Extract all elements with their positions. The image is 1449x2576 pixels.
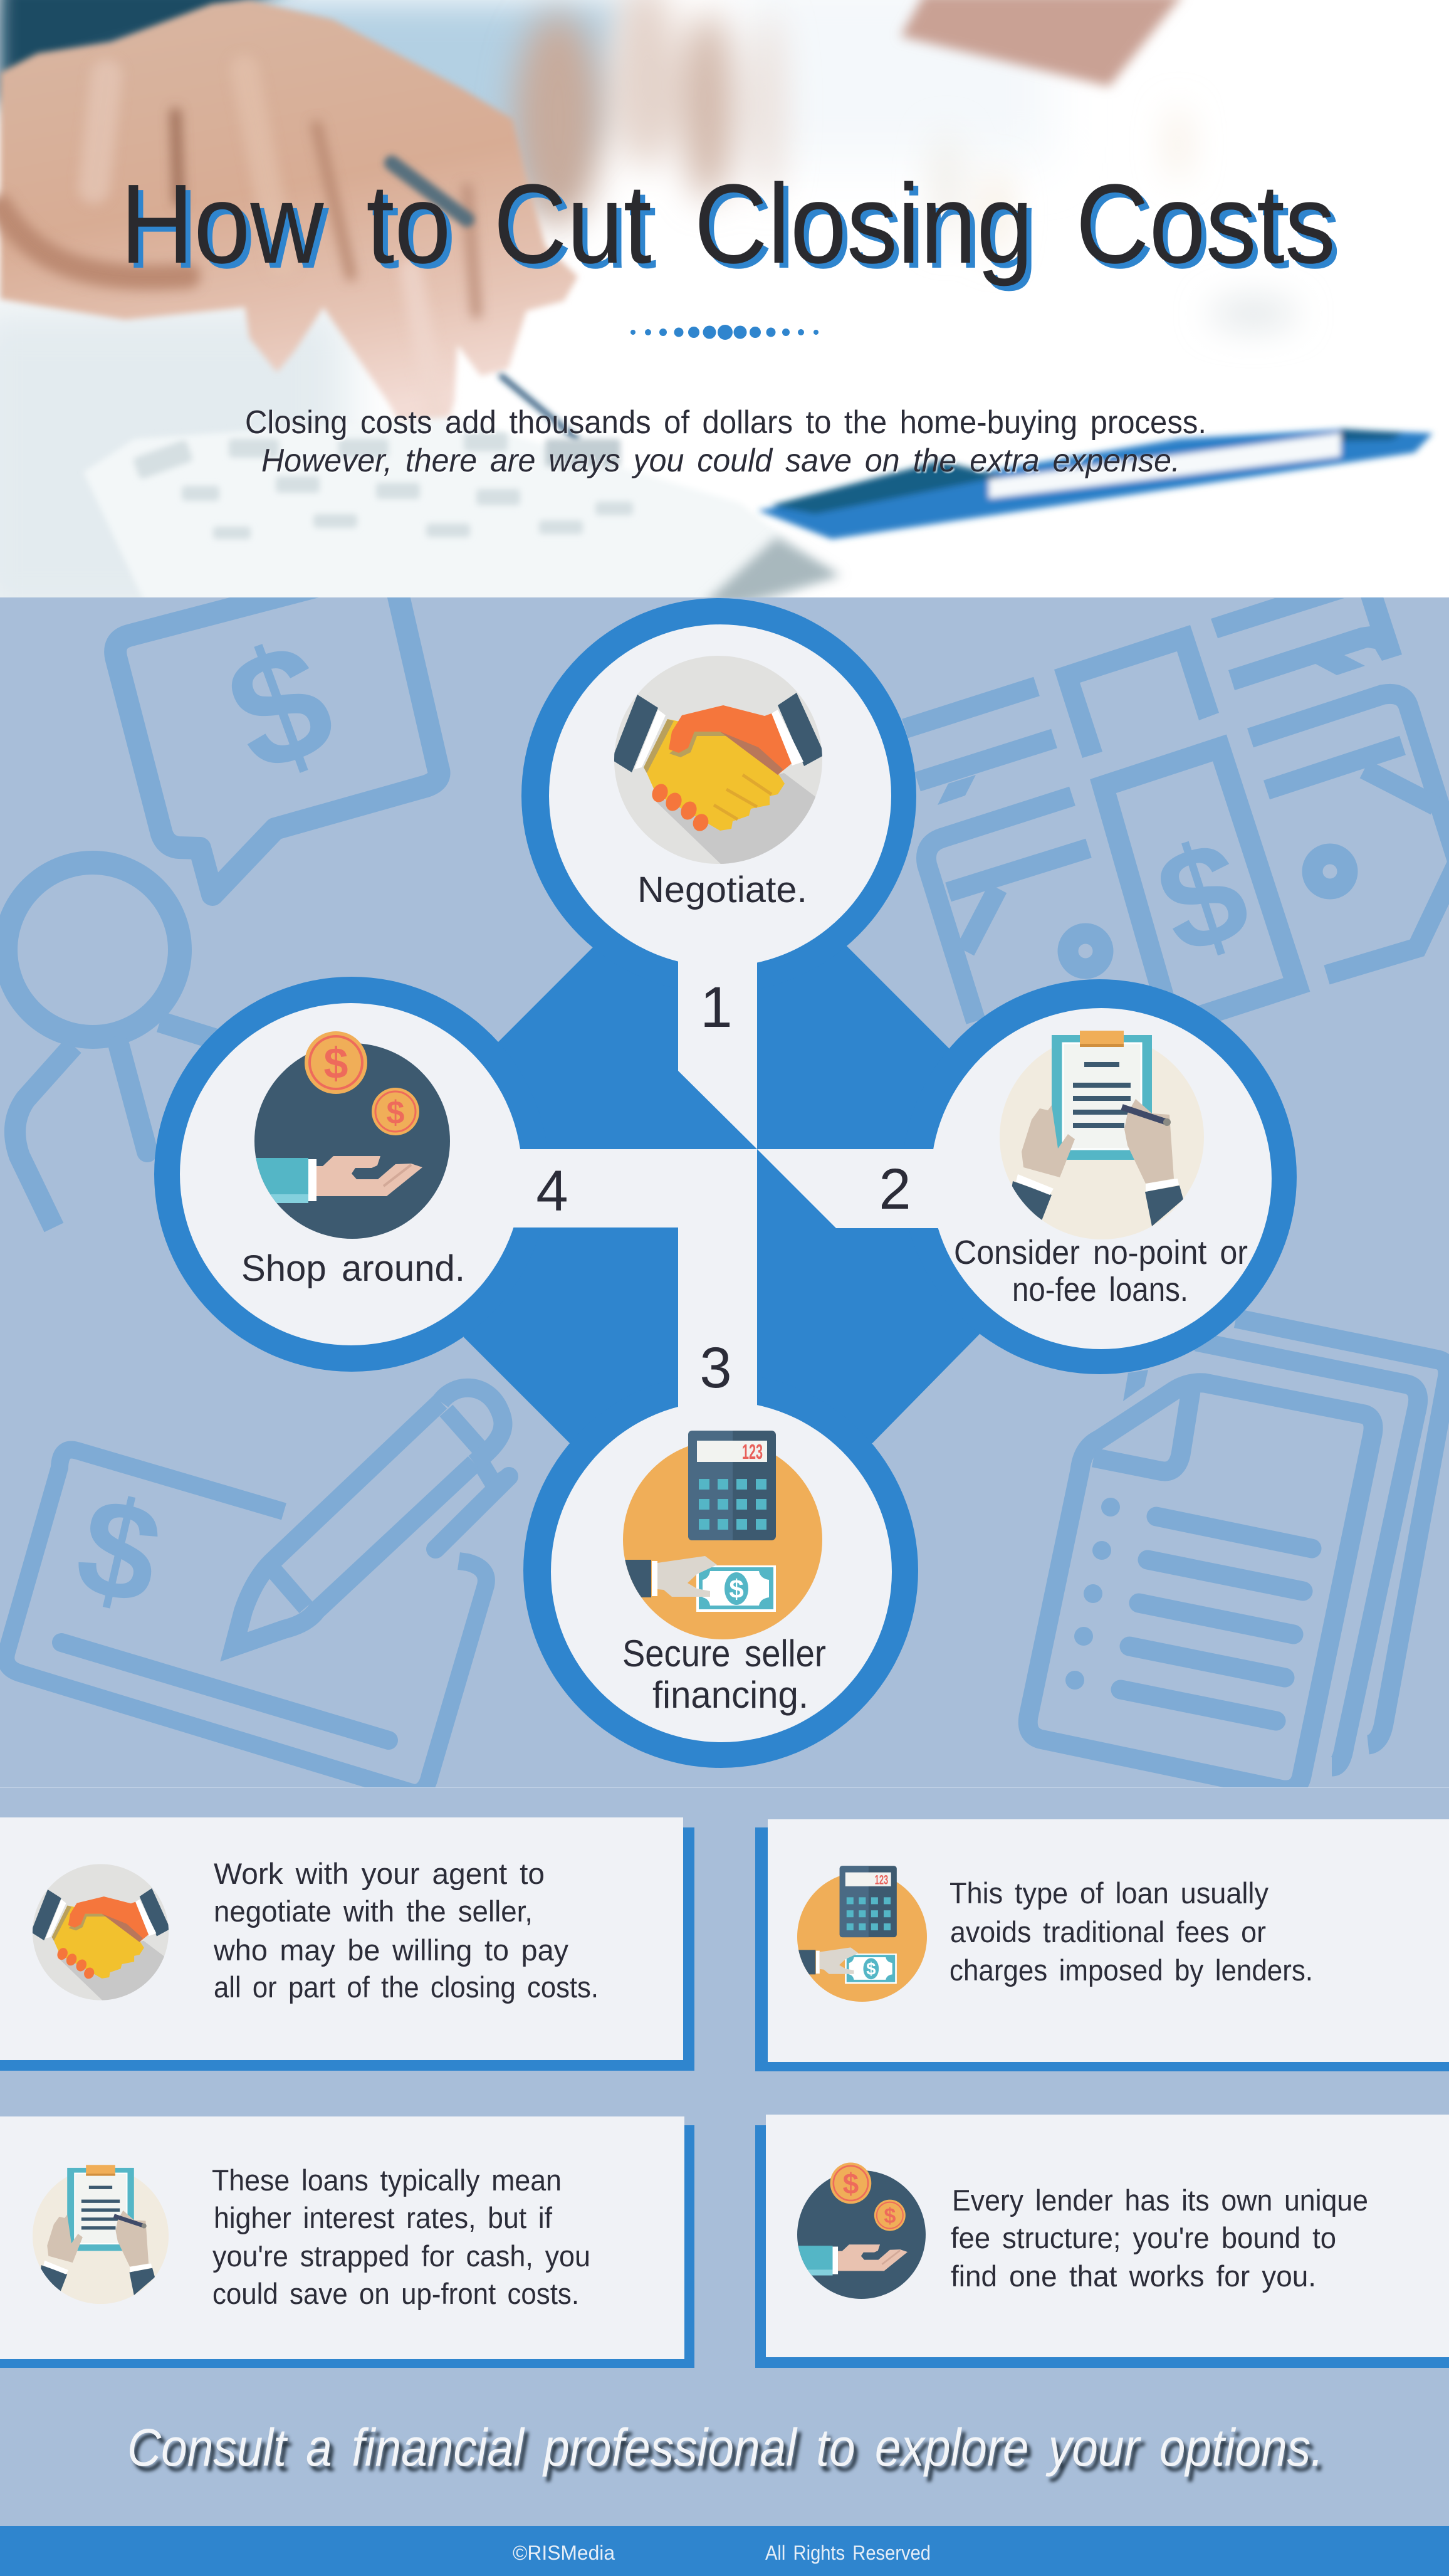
card text: could save on up-front costs. [212, 2277, 579, 2310]
closing call to action: Consult a financial professional to explore your options. [127, 2418, 1324, 2477]
card icon: calculator [797, 1866, 927, 2002]
footer credits: All Rights Reserved [765, 2542, 931, 2564]
label: Secure seller financing: financing. [652, 1674, 808, 1716]
label: Consider no-point or no-fee loans: no-fee loans. [1012, 1271, 1188, 1308]
footer credits: ©RISMedia [513, 2542, 615, 2564]
ghost icon: speech bubble with dollar: $ [206, 605, 354, 809]
panel: seller financing card [755, 1819, 1449, 2071]
ghost icon: person [6, 863, 216, 1228]
card icon: calculator: 123 [875, 1873, 888, 1888]
card icon: coins and hand: $ [843, 2167, 859, 2200]
icon: calculator and cash: 123 [742, 1440, 763, 1463]
panel: negotiate card [0, 1817, 694, 2071]
clipboard [758, 429, 1433, 539]
label: Negotiate: Negotiate. [637, 870, 807, 910]
card icon: calculator: $ [866, 1959, 876, 1979]
hero photo: hand on calculator and model house [0, 0, 1449, 627]
icon: calculator and cash [622, 1431, 822, 1639]
panel: shop around card [755, 2115, 1449, 2368]
ghost icon: check and pen [6, 1388, 509, 1793]
card text: find one that works for you. [951, 2259, 1316, 2293]
title: How to Cut Closing Costs [120, 161, 1336, 287]
intro text [245, 404, 1206, 479]
card text: fee structure; you're bound to [951, 2221, 1336, 2254]
step numbers: 2 [879, 1157, 911, 1221]
ghost icon: documents [1028, 1318, 1448, 1790]
icon: coins over open hand: $ [324, 1039, 348, 1088]
step numbers [536, 975, 911, 1400]
blue diamond [464, 945, 980, 1443]
step numbers: 4 [536, 1159, 568, 1223]
icon: calculator and cash: $ [729, 1574, 744, 1604]
step numbers: 1 [700, 975, 733, 1039]
card text: you're strapped for cash, you [212, 2239, 590, 2273]
card text [213, 1857, 599, 2004]
icon: handshake [612, 656, 825, 866]
intro text: Closing costs add thousands of dollars to the home-buying process. [245, 404, 1206, 441]
icon: clipboard held by hands [1000, 1031, 1204, 1239]
step numbers: 3 [699, 1336, 732, 1400]
card text [949, 1876, 1313, 1987]
circle faces and pinwheel arms [180, 624, 1272, 1742]
label: Shop around: Shop around. [241, 1248, 465, 1289]
dotted divider [630, 325, 819, 340]
ghost icon: speech bubble with dollar [115, 567, 439, 895]
card text [212, 2163, 590, 2310]
label: Secure seller financing: Secure seller [622, 1632, 826, 1674]
card text: higher interest rates, but if [214, 2201, 553, 2234]
card icon: clipboard [33, 2165, 169, 2304]
footer bar [0, 2526, 1449, 2576]
card icon: coins and hand: $ [884, 2204, 896, 2228]
calculator [83, 417, 841, 608]
icon: coins over open hand: $ [387, 1095, 405, 1131]
card text: charges imposed by lenders. [949, 1953, 1313, 1987]
label: Consider no-point or no-fee loans: Consider no-point or [954, 1234, 1248, 1271]
icon: coins over open hand [252, 1031, 450, 1239]
label: Consider no-point or no-fee loans [954, 1234, 1248, 1308]
ghost icon: stack of bills: $ [1139, 808, 1265, 986]
pen [392, 163, 577, 439]
intro text: However, there are ways you could save on the extra expense. [261, 443, 1180, 479]
central diagram: pinwheel with four circles [154, 598, 1297, 1768]
card text: negotiate with the seller, [214, 1895, 533, 1928]
card text: avoids traditional fees or [950, 1915, 1266, 1948]
card text: all or part of the closing costs. [214, 1970, 599, 2004]
ghost icon: stack of bills [905, 597, 1449, 1021]
card text [951, 2184, 1368, 2293]
card icon: coins and hand [795, 2163, 926, 2299]
hand [0, 0, 578, 456]
label: Secure seller financing [622, 1632, 826, 1716]
circle rings [154, 598, 1297, 1768]
ghost icon: check and pen: $ [64, 1466, 174, 1636]
background ghost icons [6, 567, 1449, 1793]
card text: Work with your agent to [214, 1857, 545, 1890]
footer credits [513, 2542, 931, 2564]
card icon: handshake [31, 1864, 170, 2002]
card text: Every lender has its own unique [952, 2184, 1368, 2217]
card text: These loans typically mean [212, 2163, 562, 2197]
card text: This type of loan usually [949, 1876, 1269, 1910]
card text: who may be willing to pay [213, 1933, 568, 1967]
panel: no-point loans card [0, 2116, 694, 2368]
